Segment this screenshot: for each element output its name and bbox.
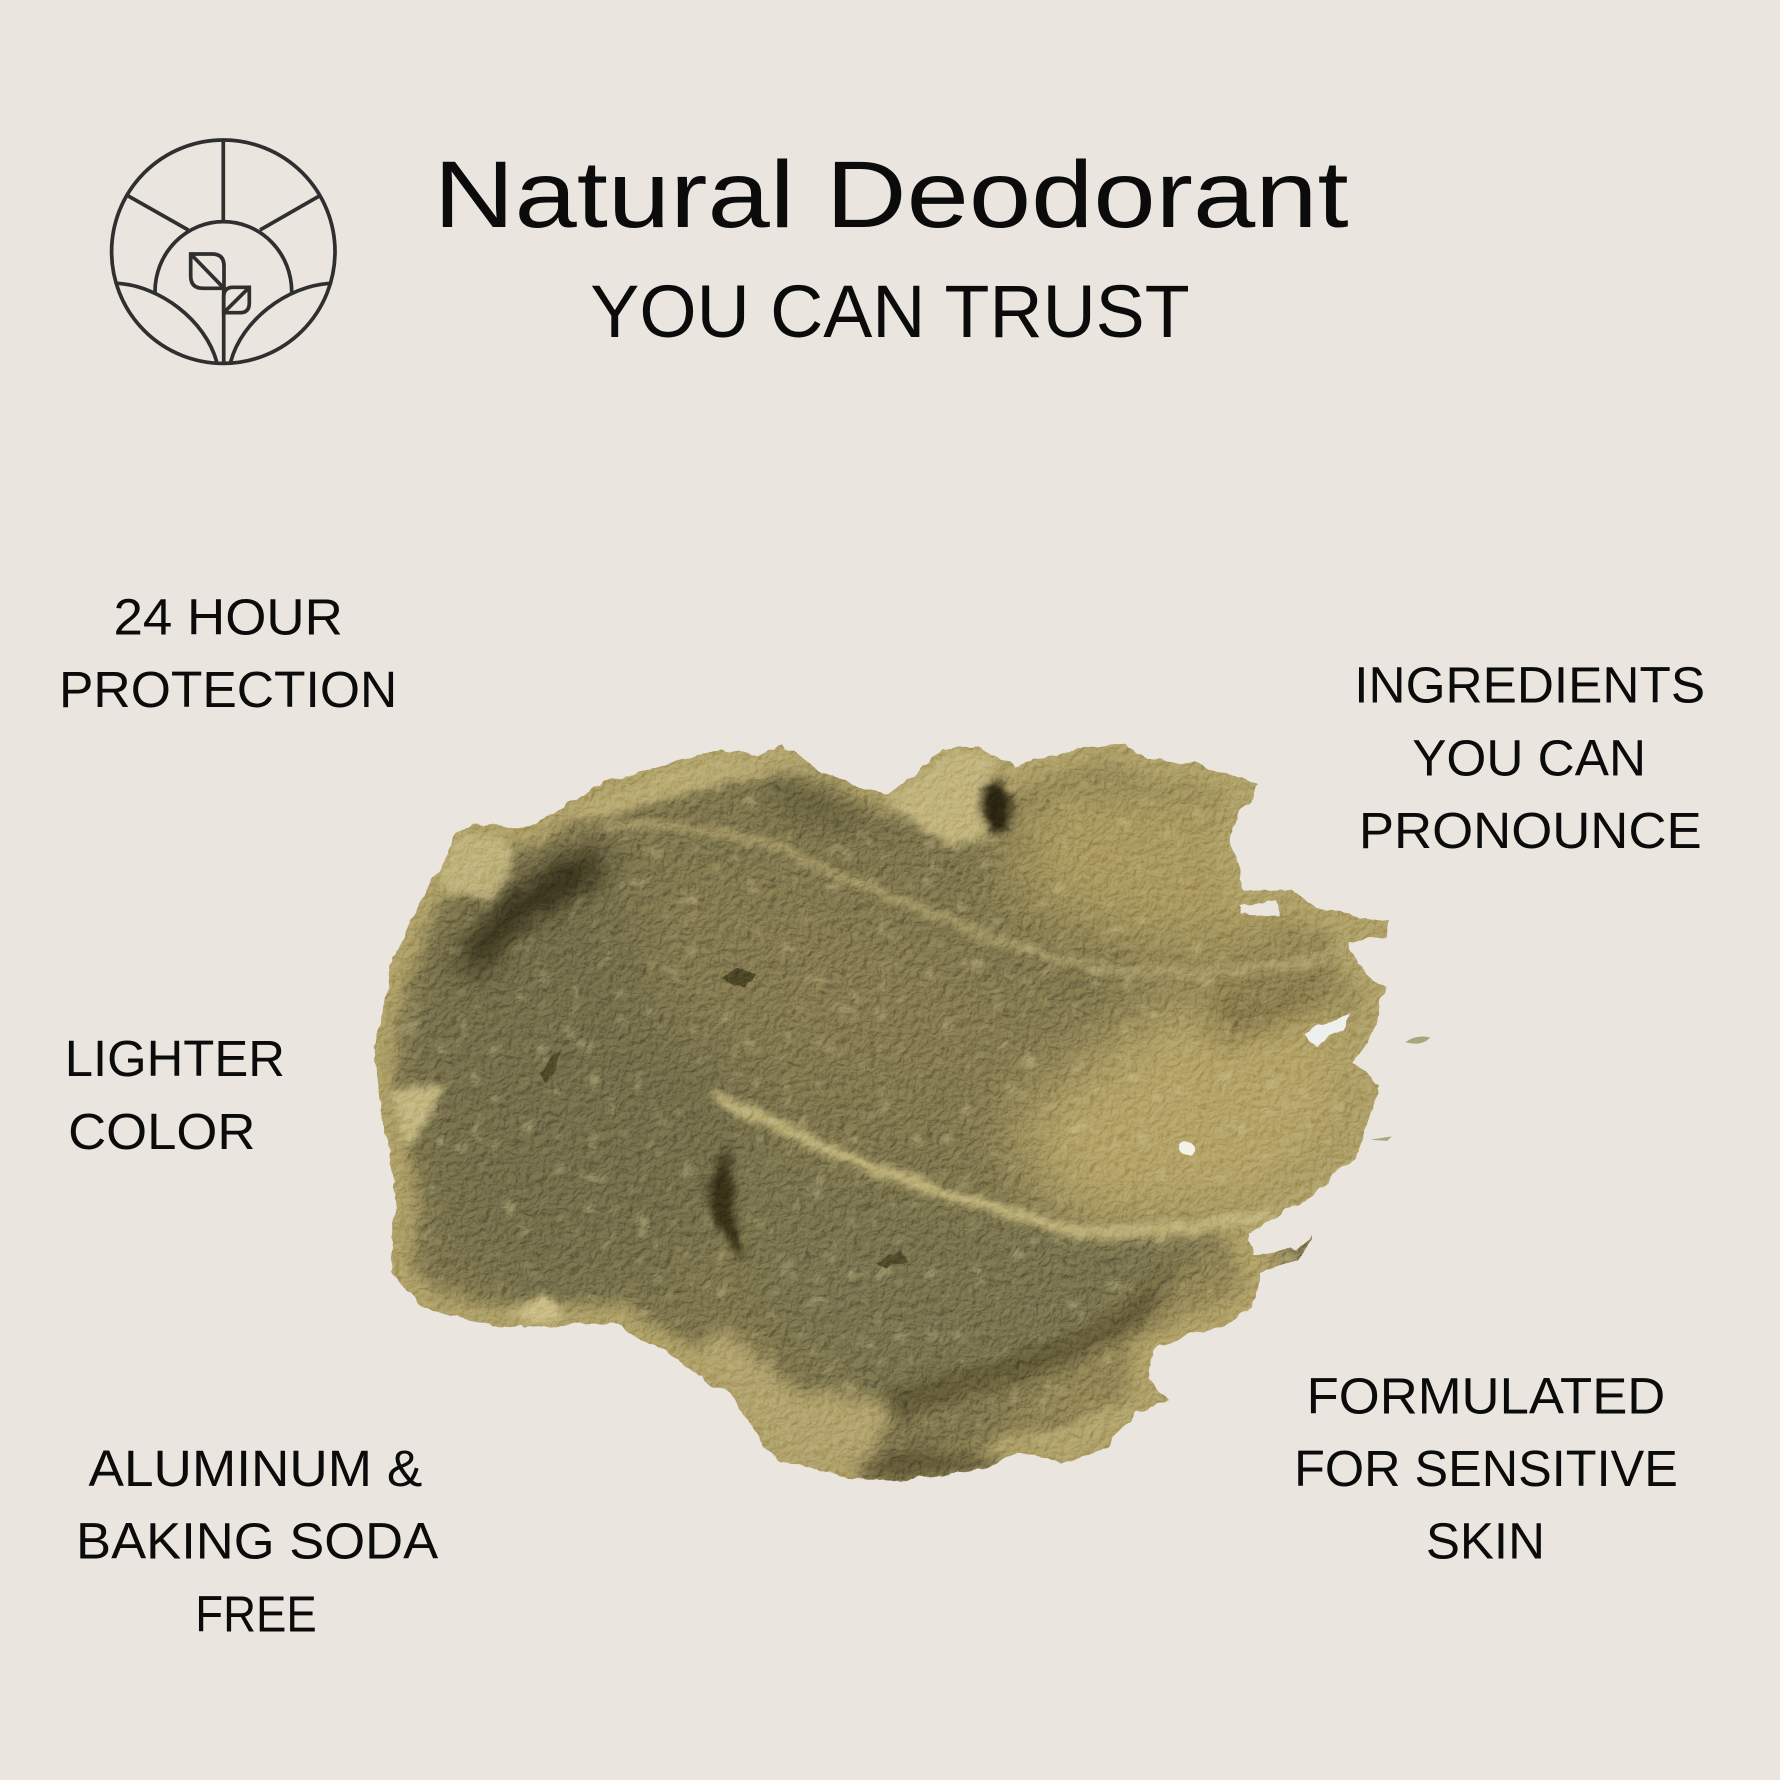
label: aluminum and baking soda free: FREE	[195, 1585, 317, 1642]
bottom lump	[681, 1328, 897, 1470]
label: 24 hour protection: 24 HOUR	[114, 589, 343, 646]
label: 24 hour protection: PROTECTION	[59, 661, 397, 718]
label: ingredients you can pronounce	[1354, 657, 1705, 859]
ridge highlights	[602, 825, 1351, 972]
light lower-right lobe	[999, 976, 1374, 1232]
label: lighter color	[65, 1030, 285, 1160]
centre band tone	[644, 896, 980, 1058]
bottom right crumbs	[990, 1404, 1126, 1452]
light top-right zone	[1010, 772, 1351, 965]
left olive tone	[427, 899, 732, 1282]
label: ingredients you can pronounce: INGREDIENTS	[1354, 657, 1705, 714]
label: formulated for sensitive skin: FORMULATED	[1307, 1367, 1665, 1424]
top-left light lump	[437, 831, 513, 905]
label: lighter color: LIGHTER	[65, 1030, 285, 1087]
outer light rim	[375, 744, 1391, 1481]
bottom edge shadow	[851, 1447, 1010, 1484]
deep shadow top-left	[454, 851, 613, 976]
infographic canvas	[63, 138, 1703, 1632]
label: aluminum and baking soda free: BAKING SODA	[76, 1513, 438, 1570]
background-coloured notch	[1240, 904, 1277, 914]
label: lighter color: COLOR	[68, 1103, 255, 1160]
label: ingredients you can pronounce: YOU CAN	[1412, 729, 1646, 786]
upper groove shadow	[755, 772, 897, 829]
label: aluminum and baking soda free: ALUMINUM &	[89, 1440, 422, 1497]
lower groove shadow	[880, 1260, 1181, 1419]
label: aluminum and baking soda free	[76, 1440, 438, 1642]
white specks	[1303, 1013, 1353, 1047]
bump texture	[363, 732, 1402, 1493]
smear body with shading	[363, 732, 1402, 1493]
label: 24 hour protection	[59, 589, 397, 718]
left edge crumbs	[392, 1084, 445, 1147]
crevice shadow	[706, 1144, 744, 1260]
label: formulated for sensitive skin: SKIN	[1426, 1513, 1545, 1570]
speckle highlights	[396, 777, 1344, 1450]
label: formulated for sensitive skin	[1294, 1367, 1678, 1570]
small pits	[721, 967, 758, 990]
top edge light band	[568, 749, 820, 817]
crumbs near swatch	[1370, 1037, 1430, 1141]
product swatch: deodorant smear	[363, 732, 1430, 1493]
top centre lump	[883, 749, 999, 846]
lower pocket	[1012, 1226, 1214, 1280]
title: Natural Deodorant	[434, 142, 1349, 247]
darker band before right lobe	[1215, 976, 1340, 1044]
bottom-right lobe	[1004, 1251, 1240, 1430]
label: formulated for sensitive skin: FOR SENSITIVE	[1294, 1440, 1678, 1497]
subtitle: YOU CAN TRUST	[590, 270, 1190, 353]
bottom-left crumb	[509, 1294, 564, 1326]
shadow at top lump	[981, 781, 1010, 836]
logo: circular plant emblem	[112, 140, 335, 363]
label: ingredients you can pronounce: PRONOUNCE	[1359, 802, 1702, 859]
